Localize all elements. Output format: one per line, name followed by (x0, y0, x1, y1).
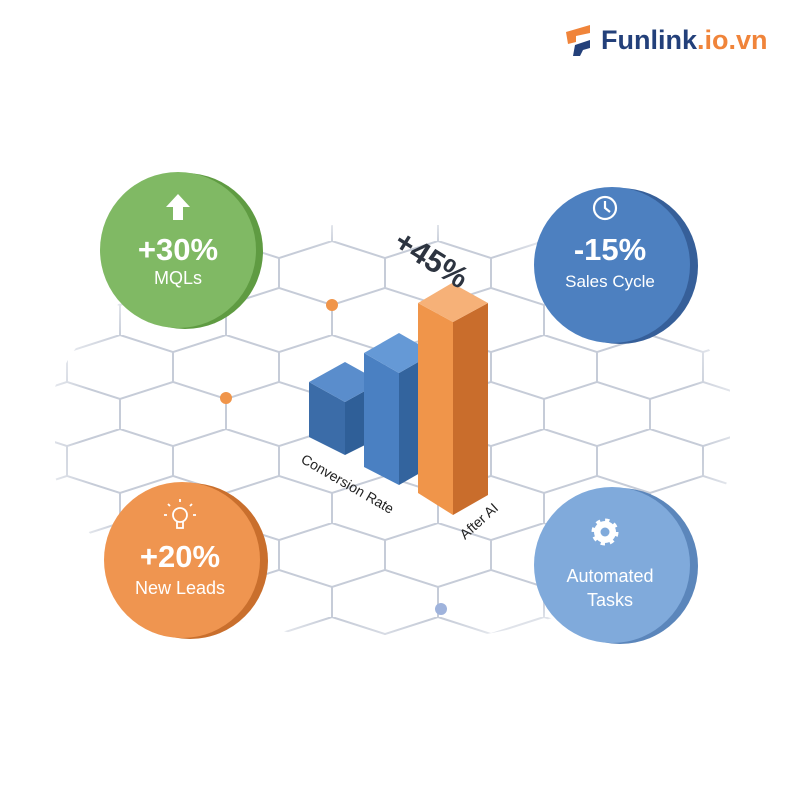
bar chart (298, 223, 501, 542)
panel: automated tasks: Tasks (587, 590, 633, 610)
panel: new leads (104, 482, 268, 639)
panel: automated tasks: Automated (566, 566, 654, 586)
panel: new leads: New Leads (135, 578, 225, 598)
panel: new leads: +20% (140, 539, 220, 574)
panel: MQLs: MQLs (154, 268, 202, 288)
label: after AI: After AI (456, 500, 501, 542)
icon: clock (594, 197, 616, 219)
bar 3 (418, 283, 488, 515)
icon: logo mark (566, 25, 590, 56)
bar 2 (364, 333, 434, 485)
logo (566, 25, 768, 56)
icon: up arrow (166, 194, 190, 220)
connector dots (220, 299, 447, 615)
logo text: Funlink.io.vn (601, 25, 768, 55)
panel: automated tasks (534, 487, 698, 644)
icon: gear (594, 521, 616, 543)
panel: sales cycle (534, 187, 698, 344)
icon: lightbulb (164, 499, 196, 528)
panel: sales cycle: Sales Cycle (565, 272, 655, 291)
bar 1 (309, 362, 381, 455)
chart value: +45% (388, 223, 475, 295)
panel: MQLs: +30% (138, 232, 218, 267)
panel: MQLs (100, 172, 263, 329)
label: conversion rate: Conversion Rate (298, 451, 397, 517)
panel: sales cycle: -15% (574, 232, 646, 267)
